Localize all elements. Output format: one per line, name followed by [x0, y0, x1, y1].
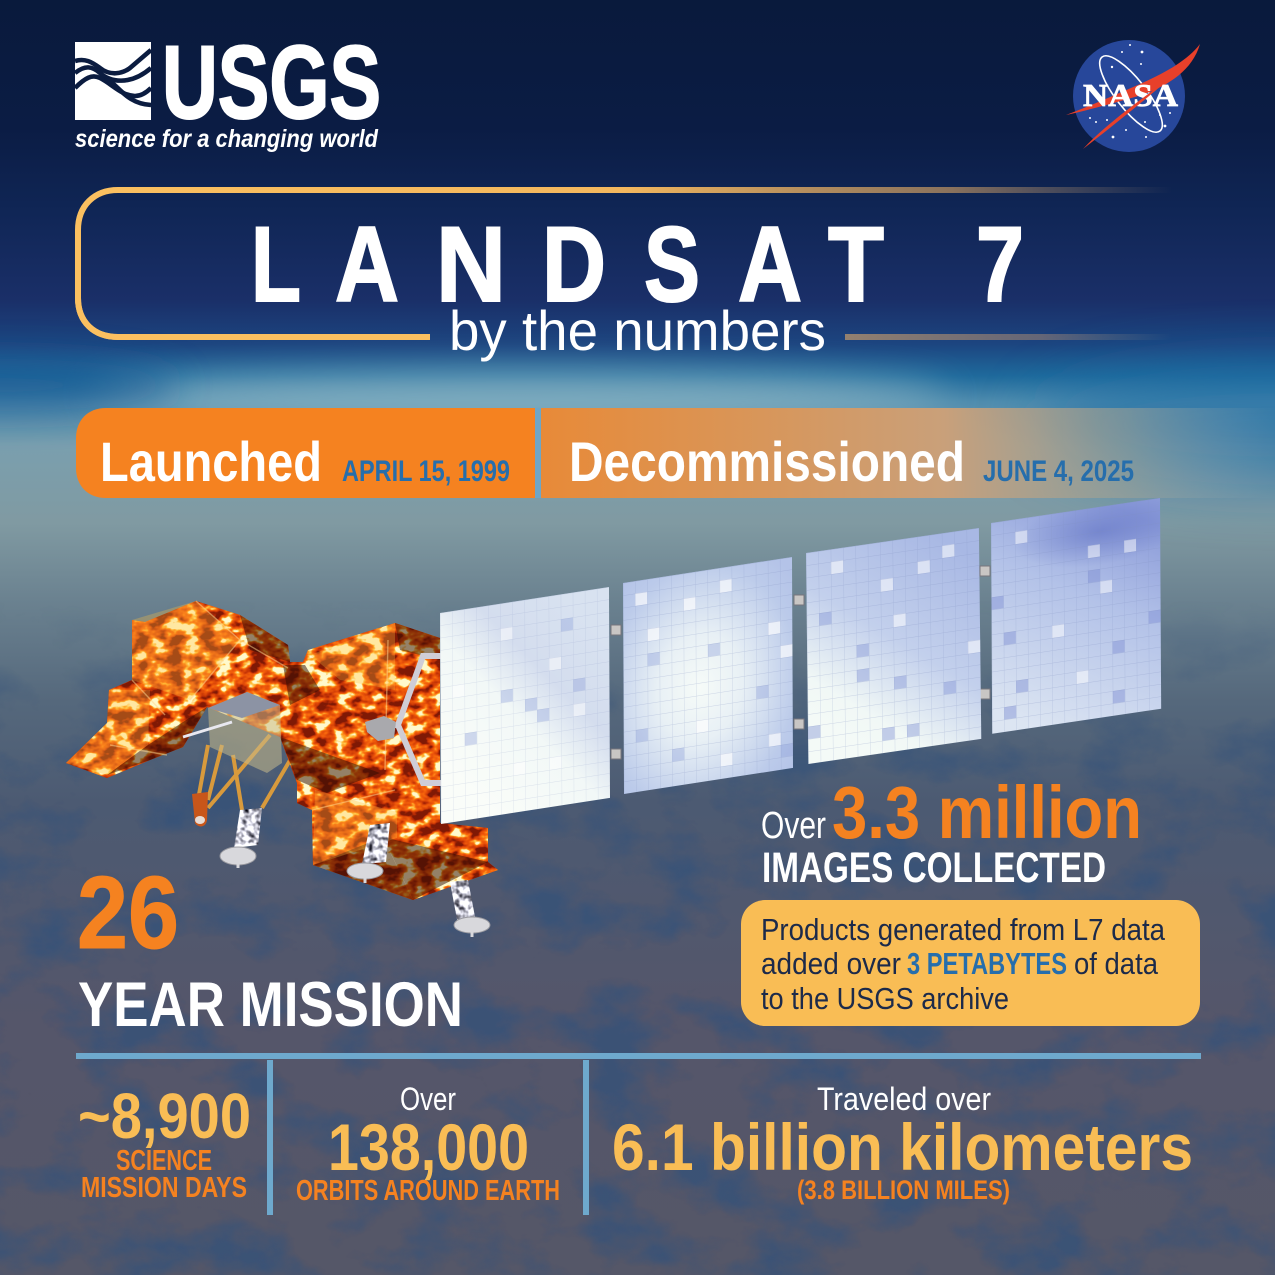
orbits label: ORBITS AROUND EARTH: [296, 1175, 560, 1207]
3.3 million: 3.3 million: [832, 771, 1142, 854]
stat: science mission days: [78, 1080, 251, 1204]
title: A: [738, 204, 802, 324]
mission days label: MISSION DAYS: [81, 1172, 247, 1204]
foil shadow facets: [107, 615, 488, 900]
launch date: APRIL 15, 1999: [342, 455, 510, 488]
decommissioned label: Decommissioned: [569, 430, 965, 493]
solar array: [440, 498, 1161, 824]
logo: USGS: [75, 25, 381, 153]
title: D: [542, 204, 606, 324]
stat: 26 year mission: [77, 855, 463, 1040]
icon: USGS wave square: [75, 42, 151, 120]
foil fold highlights: [110, 601, 395, 810]
callout background: [741, 900, 1200, 1026]
panel: launch and decommission ribbon: [76, 408, 1275, 498]
solar panel 3: [806, 528, 981, 764]
hinges: [611, 566, 990, 759]
solar panel 1: [440, 587, 610, 824]
title: N: [436, 204, 506, 324]
solar panel 2: [623, 557, 793, 794]
decommission date: JUNE 4, 2025: [983, 455, 1134, 488]
stats divider lines: [76, 1053, 1201, 1215]
stat: images collected: [761, 771, 1142, 892]
NASA wordmark: NASA: [1083, 77, 1178, 113]
NASA orbit ring: [1090, 48, 1172, 140]
over label: Over: [400, 1081, 456, 1117]
launched background: [76, 408, 535, 498]
solar panel 4: [991, 498, 1161, 734]
stat: orbits: [296, 1081, 560, 1207]
miles label: (3.8 BILLION MILES): [797, 1175, 1010, 1205]
logo: NASA: [1066, 40, 1200, 152]
antenna stalks: [234, 808, 476, 925]
callout text line 1: Products generated from L7 data: [761, 912, 1166, 947]
science label: SCIENCE: [116, 1145, 212, 1177]
title: T: [828, 204, 884, 324]
satellite legs: [198, 735, 296, 810]
title: 7: [976, 204, 1024, 324]
stat: distance traveled: [612, 1081, 1193, 1205]
title: [251, 204, 1024, 324]
launched label: Launched: [100, 430, 322, 493]
138,000 number: 138,000: [328, 1110, 529, 1184]
title: L: [251, 204, 301, 324]
NASA red chevron: [1066, 44, 1200, 115]
NASA stars: [1089, 44, 1171, 138]
petabytes highlight: 3 PETABYTES: [907, 946, 1067, 981]
divider: [535, 408, 541, 498]
decommissioned background: [541, 408, 1275, 498]
title: S: [644, 204, 700, 324]
callout text line 2: added over: [761, 946, 901, 981]
USGS tagline: science for a changing world: [75, 125, 379, 153]
8,900 number: ~8,900: [78, 1080, 251, 1152]
over label: Over: [761, 805, 826, 847]
traveled over label: Traveled over: [817, 1081, 991, 1117]
number 26: 26: [77, 855, 179, 970]
USGS wordmark: USGS: [162, 25, 381, 141]
foil bright facets: [66, 601, 397, 865]
instrument glass box: [183, 692, 282, 773]
antenna dishes: [220, 847, 490, 937]
satellite body: [66, 601, 498, 900]
small cylinder: [192, 792, 208, 826]
callout text line 2 end: of data: [1074, 946, 1159, 981]
NASA thin red vector: [1083, 78, 1170, 149]
title: A: [335, 204, 399, 324]
images collected label: IMAGES COLLECTED: [762, 844, 1106, 892]
satellite illustration: [66, 498, 1161, 937]
kilometers number: 6.1 billion kilometers: [612, 1110, 1193, 1184]
callout: petabytes: [741, 900, 1200, 1026]
year mission label: YEAR MISSION: [78, 970, 463, 1040]
subtitle: by the numbers: [449, 299, 826, 362]
silver thermal blanket: [365, 716, 396, 741]
title frame: [78, 190, 1172, 340]
hexagonal bracket: [385, 656, 441, 783]
callout text line 3: to the USGS archive: [761, 981, 1009, 1016]
